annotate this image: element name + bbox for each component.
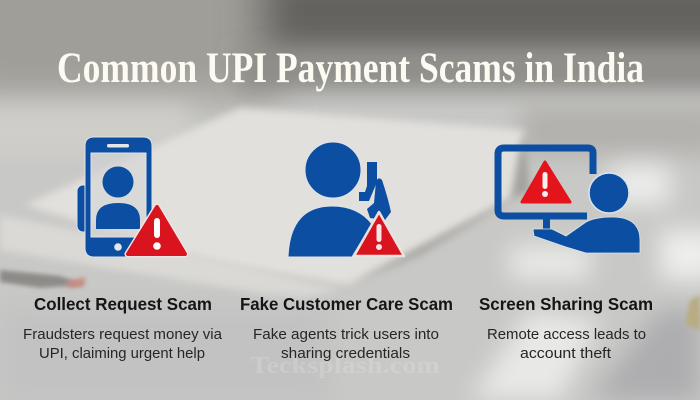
description: Fake agents trick users into (253, 326, 439, 343)
heading: Collect Request Scam (34, 294, 212, 314)
heading: Fake Customer Care Scam (240, 294, 453, 314)
description: UPI, claiming urgent help (39, 345, 205, 362)
panel: screen sharing scam (479, 148, 653, 362)
description (23, 326, 223, 362)
description: account theft (520, 345, 612, 362)
watermark: Tecksplash.com (250, 353, 440, 379)
description: sharing credentials (281, 345, 410, 362)
panel: fake customer care scam (240, 142, 453, 362)
panel: collect request scam (23, 137, 223, 362)
description (487, 326, 646, 362)
icon: person on phone with warning (288, 142, 404, 257)
icon: monitor with warning and person (498, 148, 640, 253)
icon: phone with person and warning (77, 137, 185, 257)
description: Remote access leads to (487, 326, 646, 343)
description (253, 326, 439, 362)
heading: Screen Sharing Scam (479, 294, 653, 314)
description: Fraudsters request money via (23, 326, 223, 343)
